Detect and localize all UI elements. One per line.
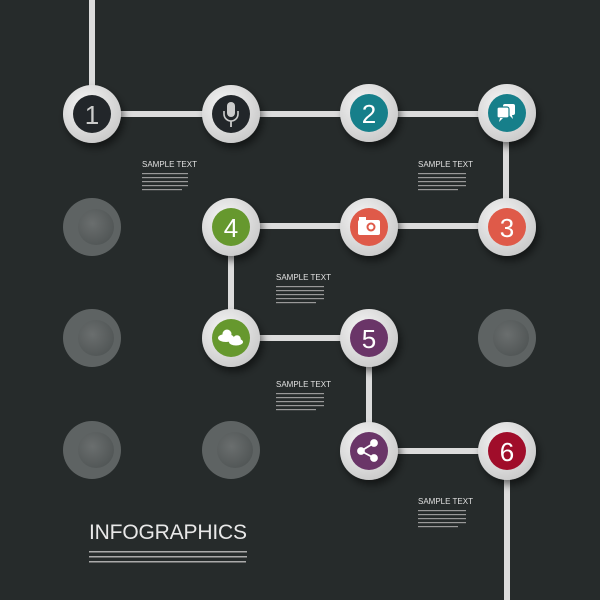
text block 5 <box>418 497 473 527</box>
text block 4 <box>276 380 331 410</box>
node 2 <box>340 84 398 142</box>
icon: cloud <box>202 309 260 367</box>
connector path <box>92 0 507 600</box>
text block 3 <box>276 273 331 303</box>
title: INFOGRAPHICS <box>89 521 247 544</box>
node 5: 5 <box>362 324 376 354</box>
node 6: 6 <box>500 437 514 467</box>
text block 3: SAMPLE TEXT <box>276 273 331 282</box>
text block 1: SAMPLE TEXT <box>142 160 197 169</box>
node 4: 4 <box>224 213 238 243</box>
node 6 <box>478 422 536 480</box>
text block 4: SAMPLE TEXT <box>276 380 331 389</box>
node 2: 2 <box>362 99 376 129</box>
node 5 <box>340 309 398 367</box>
node 3 <box>478 198 536 256</box>
node 3: 3 <box>500 213 514 243</box>
icon: camera <box>340 198 398 256</box>
text block 2: SAMPLE TEXT <box>418 160 473 169</box>
grey placeholder circles <box>63 198 536 479</box>
node 4 <box>202 198 260 256</box>
icon: share <box>340 422 398 480</box>
node 1: 1 <box>85 100 99 130</box>
text block 1 <box>142 160 197 190</box>
node 1 <box>63 85 121 143</box>
text block 2 <box>418 160 473 190</box>
icon: microphone <box>202 85 260 143</box>
icon: chat bubbles <box>478 84 536 142</box>
text block 5: SAMPLE TEXT <box>418 497 473 506</box>
